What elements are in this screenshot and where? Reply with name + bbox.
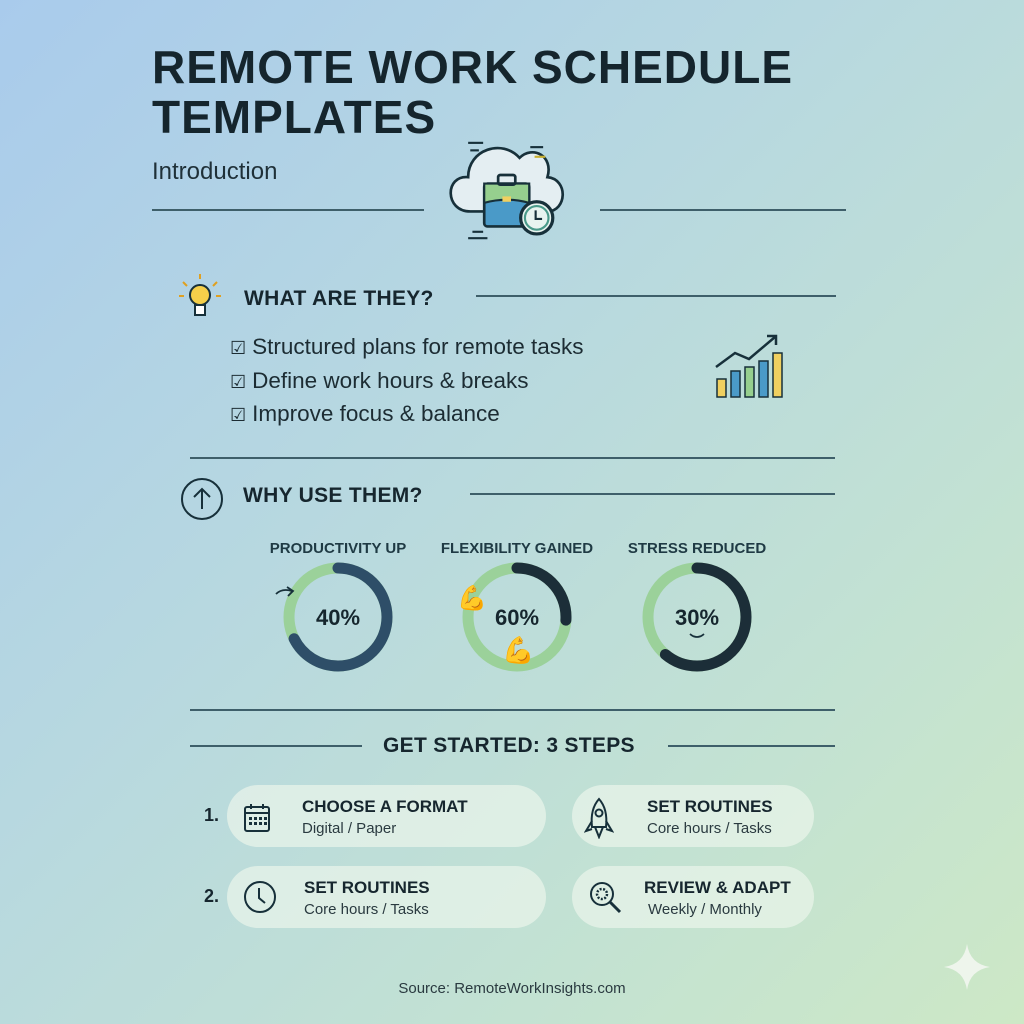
title: REMOTE WORK SCHEDULE [152, 41, 793, 93]
list: ☑︎ Structured plans for remote tasks [230, 334, 584, 359]
subtitle: Introduction [152, 158, 277, 185]
title: TEMPLATES [152, 91, 436, 143]
step 2: Core hours / Tasks [304, 901, 429, 918]
chart: flexibility: FLEXIBILITY GAINED [441, 540, 593, 557]
list: ☑︎ Improve focus & balance [230, 401, 500, 426]
step: review & adapt: Weekly / Monthly [648, 901, 762, 918]
panel: why use them [181, 478, 835, 520]
step 1: 1. [204, 805, 219, 825]
step: set routines (right): Core hours / Tasks [647, 820, 772, 837]
icon: lightbulb [179, 274, 221, 316]
step: set routines (right) [572, 785, 814, 847]
chart: flexibility: 💪 [457, 585, 487, 612]
heading: WHAT ARE THEY? [244, 287, 434, 310]
icon: up arrow circle [181, 478, 223, 520]
chart: productivity: PRODUCTIVITY UP [270, 540, 406, 557]
icon: sparkle [944, 944, 990, 990]
chart: stress: STRESS REDUCED [628, 540, 766, 557]
heading: get started: GET STARTED: 3 STEPS [383, 734, 635, 757]
heading: WHY USE THEM? [243, 484, 423, 507]
list [230, 334, 584, 426]
step 2 [204, 866, 546, 928]
panel: what are they [179, 274, 836, 426]
step 1: CHOOSE A FORMAT [302, 797, 468, 816]
list: ☑︎ Define work hours & breaks [230, 368, 529, 392]
step 1: Digital / Paper [302, 820, 396, 837]
icon: cloud briefcase clock [449, 142, 564, 240]
source: Source: RemoteWorkInsights.com [398, 980, 626, 997]
chart: stress [628, 540, 766, 672]
chart: flexibility [441, 540, 593, 672]
step: review & adapt: REVIEW & ADAPT [644, 878, 791, 897]
chart: stress: 30% [675, 605, 719, 630]
step: review & adapt [572, 866, 814, 928]
step: set routines (right): SET ROUTINES [647, 797, 773, 816]
step 2: SET ROUTINES [304, 878, 430, 897]
title [152, 41, 793, 143]
chart: flexibility: 💪 [502, 635, 534, 665]
chart: productivity: 40% [316, 605, 360, 630]
chart: productivity [270, 540, 406, 672]
icon: bar chart [715, 334, 783, 398]
chart: flexibility: 60% [495, 605, 539, 630]
step 1 [204, 785, 546, 847]
step 2: 2. [204, 886, 219, 906]
